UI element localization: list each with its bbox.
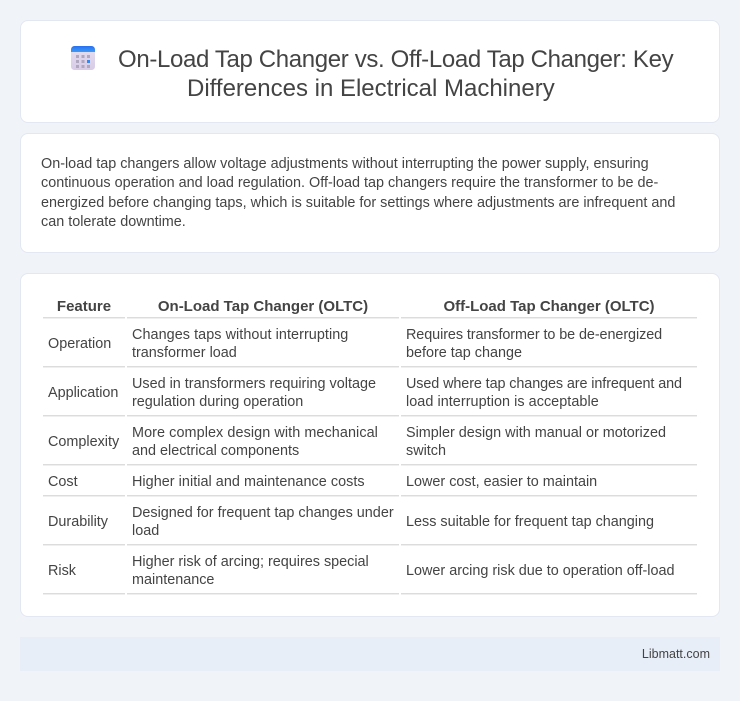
Application OLTC: regulation during operation bbox=[132, 394, 303, 410]
Complexity OLTC: More complex design with mechanical bbox=[132, 425, 378, 441]
Durability OLTC bbox=[132, 505, 394, 539]
Operation OLTC bbox=[132, 327, 348, 361]
Durability OLTC: load bbox=[132, 523, 159, 539]
intro paragraph: energized before changing taps, which is suitable for settings where adjustments are infrequent and bbox=[41, 195, 675, 211]
Risk OLTC: Higher risk of arcing; requires special bbox=[132, 554, 369, 570]
Complexity OLTC bbox=[132, 425, 378, 459]
Application OLTC bbox=[132, 376, 376, 410]
Application off-load: Used where tap changes are infrequent and bbox=[406, 376, 682, 392]
intro paragraph: can tolerate downtime. bbox=[41, 214, 186, 230]
Application OLTC: Used in transformers requiring voltage bbox=[132, 376, 376, 392]
Durability off-load: Less suitable for frequent tap changing bbox=[406, 514, 654, 530]
row: Application: Application bbox=[48, 385, 118, 401]
Complexity OLTC: and electrical components bbox=[132, 443, 299, 459]
title: On-Load Tap Changer vs. Off-Load Tap Changer: Key bbox=[118, 46, 673, 73]
Application off-load: load interruption is acceptable bbox=[406, 394, 599, 410]
Complexity off-load: switch bbox=[406, 443, 446, 459]
Cost OLTC: Higher initial and maintenance costs bbox=[132, 474, 365, 490]
Durability OLTC: Designed for frequent tap changes under bbox=[132, 505, 394, 521]
table header: On-Load Tap Changer: On-Load Tap Changer (OLTC) bbox=[158, 298, 368, 315]
table header: Off-Load Tap Changer: Off-Load Tap Changer (OLTC) bbox=[443, 298, 655, 315]
footer bar bbox=[20, 637, 720, 671]
row: Operation: Operation bbox=[48, 336, 111, 352]
Operation off-load: before tap change bbox=[406, 345, 522, 361]
icon: calendar grid bbox=[71, 46, 95, 70]
Risk OLTC bbox=[132, 554, 369, 588]
Application off-load bbox=[406, 376, 682, 410]
intro paragraph: continuous operation and load regulation. Off-load tap changers require the transformer to be de- bbox=[41, 175, 658, 191]
Risk off-load: Lower arcing risk due to operation off-load bbox=[406, 563, 675, 579]
header panel bbox=[20, 20, 720, 123]
Operation OLTC: transformer load bbox=[132, 345, 237, 361]
row: Cost: Cost bbox=[48, 474, 78, 490]
Complexity off-load bbox=[406, 425, 666, 459]
Operation off-load: Requires transformer to be de-energized bbox=[406, 327, 662, 343]
row: Risk: Risk bbox=[48, 563, 76, 579]
Operation OLTC: Changes taps without interrupting bbox=[132, 327, 348, 343]
Operation off-load bbox=[406, 327, 662, 361]
title bbox=[118, 46, 674, 102]
row: Complexity: Complexity bbox=[48, 434, 119, 450]
footer credit: Libmatt.com bbox=[642, 647, 710, 661]
row: Durability: Durability bbox=[48, 514, 108, 530]
Risk OLTC: maintenance bbox=[132, 572, 214, 588]
panel: introduction text bbox=[20, 133, 720, 253]
table header: Feature: Feature bbox=[57, 298, 111, 315]
Cost off-load: Lower cost, easier to maintain bbox=[406, 474, 597, 490]
intro paragraph bbox=[41, 156, 675, 230]
panel: comparison table bbox=[20, 273, 720, 617]
Complexity off-load: Simpler design with manual or motorized bbox=[406, 425, 666, 441]
intro paragraph: On-load tap changers allow voltage adjustments without interrupting the power supply, ensuring bbox=[41, 156, 649, 172]
title: Differences in Electrical Machinery bbox=[187, 75, 555, 102]
